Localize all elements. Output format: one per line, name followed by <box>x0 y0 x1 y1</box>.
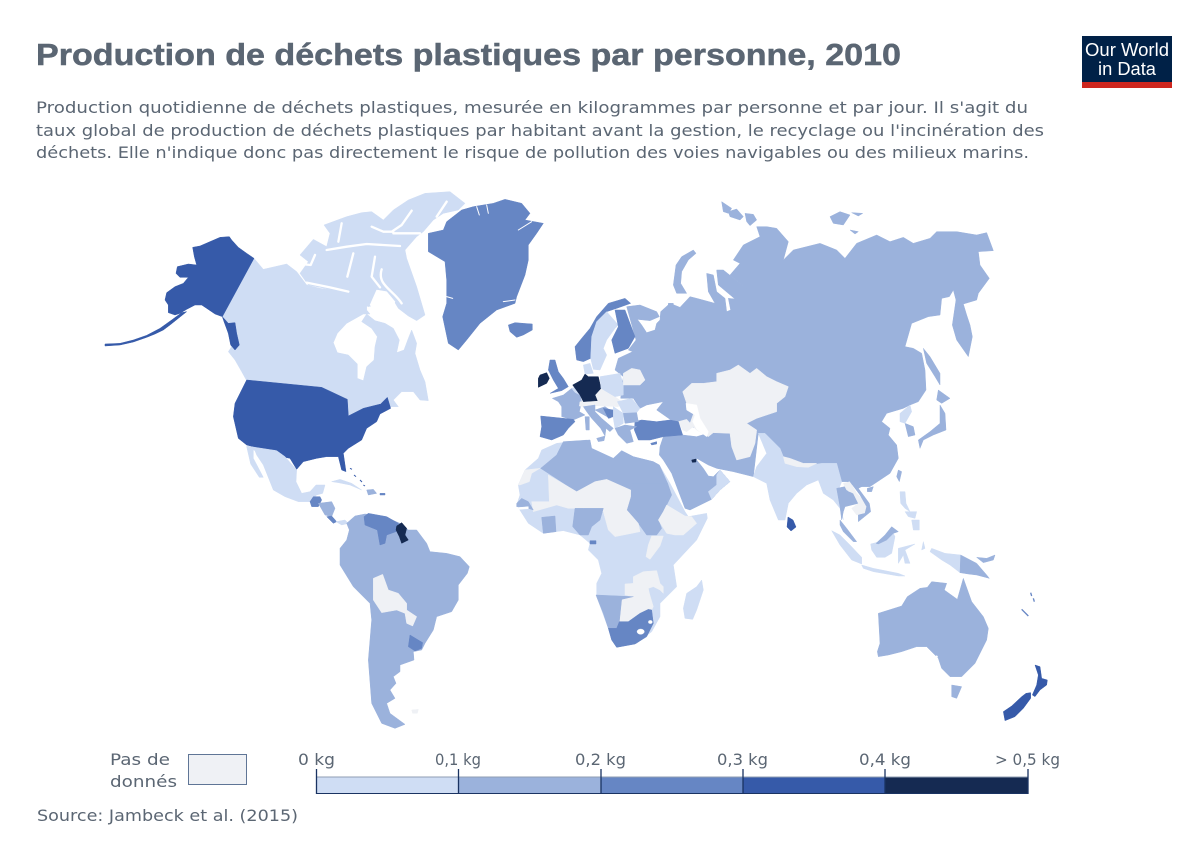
source note: Source: Jambeck et al. (2015) <box>37 806 298 825</box>
Oman <box>708 470 730 499</box>
Central America <box>310 497 348 525</box>
map: Western and Central Europe <box>538 360 645 443</box>
Finland <box>612 310 635 353</box>
Laos and Cambodia <box>843 482 867 515</box>
Poland <box>600 373 623 397</box>
Australia <box>877 578 988 677</box>
Sulawesi <box>898 544 915 563</box>
Japan <box>918 390 950 448</box>
Southern Africa no data <box>619 571 663 622</box>
subtitle text block: déchets. Elle n'indique donc pas directement le risque de pollution des voies navigables ou des milieux marins. <box>36 143 1029 162</box>
Sahel no data <box>532 475 640 537</box>
Sumatra <box>832 531 862 564</box>
Bolivia <box>373 574 417 626</box>
Taiwan <box>897 470 902 482</box>
Canada <box>222 192 465 416</box>
Africa base <box>517 440 707 647</box>
United States <box>233 380 391 472</box>
map: North America and Greenland <box>105 192 543 486</box>
Ireland <box>538 373 549 387</box>
Tasmania <box>952 685 962 698</box>
legend: no data: donnés <box>110 772 177 791</box>
legend: no data: Pas de <box>110 750 170 769</box>
Kazakhstan and Central Asia no data <box>683 365 788 460</box>
map: Russia, China and East Asia base <box>615 202 993 487</box>
Pacific islands <box>1022 593 1034 616</box>
Thailand <box>837 487 858 520</box>
logo: Our World in Data: Our World <box>1085 39 1169 60</box>
South America <box>340 514 469 728</box>
Turkey <box>634 420 683 440</box>
Namibia <box>596 595 633 628</box>
legend: colour scale: 0,2 kg <box>575 750 626 769</box>
Madagascar <box>683 580 703 619</box>
legend: colour scale: > 0,5 kg <box>995 750 1060 769</box>
Cyprus <box>651 442 657 445</box>
subtitle text block <box>36 98 1044 162</box>
legend: no data <box>110 750 246 791</box>
Middle East <box>659 432 758 510</box>
France <box>552 388 585 420</box>
map: South Asia <box>753 433 843 520</box>
Romania <box>617 398 640 413</box>
Foxe Basin <box>370 290 395 315</box>
logo: Our World in Data <box>1082 36 1172 88</box>
Sweden <box>591 312 618 370</box>
Arctic islands <box>668 202 863 307</box>
logo: Our World in Data: in Data <box>1098 58 1157 79</box>
Korea <box>900 405 915 437</box>
legend: colour scale: 0,4 kg <box>859 750 911 769</box>
Central Europe no data <box>579 388 622 407</box>
Italy <box>583 405 613 442</box>
Caribbean islands <box>332 479 385 495</box>
North Africa <box>541 440 668 492</box>
map: Southeast Asia <box>832 470 995 578</box>
Georgia and Azerbaijan <box>678 419 693 432</box>
New Zealand <box>1003 665 1047 721</box>
map: Central and South America <box>247 446 469 728</box>
Balkans <box>595 407 638 443</box>
subtitle text block: Production quotidienne de déchets plastiques, mesurée en kilogrammes par personne et par jour. Il s'agit du <box>36 98 1028 117</box>
Philippines <box>900 492 919 530</box>
Hainan <box>867 487 873 492</box>
Vietnam <box>850 480 871 522</box>
Caspian Sea <box>686 403 708 437</box>
legend: colour scale: 0,1 kg <box>435 750 481 769</box>
Malay peninsula <box>840 520 857 542</box>
Sri Lanka <box>787 517 796 531</box>
Sakhalin <box>923 348 940 385</box>
map: Africa <box>517 440 707 647</box>
Ethiopia <box>658 505 697 535</box>
South Africa <box>608 609 653 647</box>
map: Oceania <box>877 578 1047 721</box>
title: Production de déchets plastiques par personne, 2010 <box>36 37 901 72</box>
West Africa <box>517 498 603 544</box>
Mexico <box>247 446 325 502</box>
Benelux <box>572 387 580 395</box>
Belarus <box>623 368 645 385</box>
New Guinea <box>930 548 995 578</box>
Iceland <box>508 323 532 337</box>
Sudan <box>627 483 672 535</box>
Spain and Portugal <box>540 416 575 440</box>
Kuwait <box>692 459 696 462</box>
Greenland <box>428 199 543 350</box>
Germany <box>573 374 601 402</box>
Western Sahara <box>518 468 540 485</box>
Borneo <box>871 527 898 557</box>
Nepal <box>783 457 817 467</box>
legend: colour scale: 0,3 kg <box>717 750 768 769</box>
Alaska <box>105 237 254 350</box>
United Kingdom <box>548 360 568 393</box>
Uruguay <box>408 635 423 651</box>
legend: colour scale <box>298 750 1060 794</box>
map: Middle East, Central Asia and Northern Europe <box>575 298 788 510</box>
Venezuela <box>364 513 398 545</box>
Bahamas <box>350 468 365 486</box>
subtitle text block: taux global de production de déchets plastiques par habitant avant la gestion, le recyclage ou l'incinération des <box>36 121 1044 140</box>
Guyana <box>396 523 408 543</box>
world map <box>105 192 1047 728</box>
Uganda <box>646 536 663 559</box>
legend: colour scale: 0 kg <box>298 750 335 769</box>
Java and Lesser Sunda <box>862 565 905 576</box>
Denmark <box>583 363 593 374</box>
India and Myanmar <box>753 433 843 520</box>
Norway <box>575 298 631 362</box>
Moluccas <box>922 542 925 550</box>
Falkland Islands <box>412 709 418 713</box>
